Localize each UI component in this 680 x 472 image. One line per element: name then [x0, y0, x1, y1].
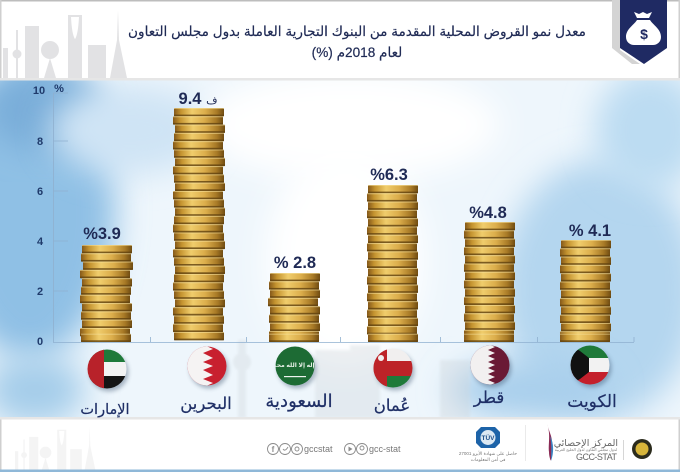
icon: Saudi flag: لا إله إلا الله محمد	[269, 362, 321, 369]
icon: Oman flag	[374, 348, 412, 388]
logo: TUV certificate: حاصل على شهادة الأيزو 27001	[459, 450, 517, 456]
icon: money bag ribbon: $	[640, 26, 648, 42]
footer skyline	[15, 426, 96, 471]
country labels	[80, 389, 617, 418]
title: معدل نمو القروض المحلية المقدمة من البنوك التجارية العاملة بدول مجلس التعاون	[128, 24, 586, 40]
axis labels: 8	[37, 136, 43, 148]
value labels: % 2.8	[274, 254, 316, 272]
axis labels: %	[54, 83, 64, 95]
bar: Oman coins	[367, 185, 418, 342]
icon: money bag ribbon	[612, 0, 667, 64]
value labels	[83, 90, 611, 272]
social icons: f	[272, 445, 275, 454]
bar: Bahrain coins	[173, 108, 225, 340]
logo: GCC-STAT	[547, 424, 652, 462]
icon: Saudi flag	[276, 346, 314, 386]
social handles: gcc-stat	[369, 444, 401, 454]
country labels: السعودية	[265, 391, 333, 412]
logo: TUV certificate: TÜV	[482, 433, 495, 442]
flag shadows	[90, 348, 612, 392]
logo: TUV certificate: في أمن المعلومات	[471, 456, 505, 462]
logo: GCC-STAT: المركز الإحصائي	[554, 438, 618, 449]
panel: chart background	[0, 60, 680, 425]
icon: Qatar flag	[470, 346, 510, 384]
country labels: الإمارات	[80, 402, 130, 418]
country labels: عُمان	[374, 396, 410, 415]
axis labels: 0	[37, 336, 43, 348]
logo: TUV certificate	[459, 427, 517, 462]
chart axes	[54, 93, 634, 342]
social handles: gccstat	[304, 444, 333, 454]
value labels: %3.9	[83, 225, 121, 243]
country labels: الكويت	[567, 392, 617, 411]
skyline watermark	[233, 340, 470, 418]
title: لعام 2018م (%)	[312, 45, 402, 60]
icon: Kuwait flag	[570, 346, 610, 384]
logo: GCC-STAT: GCC-STAT	[576, 452, 618, 462]
bar: UAE coins	[80, 245, 133, 342]
social handles	[304, 444, 401, 454]
value labels: % 4.1	[569, 222, 611, 240]
icon: Bahrain flag	[188, 346, 226, 386]
divider	[524, 425, 527, 461]
country labels: البحرين	[180, 395, 232, 414]
icon: UAE flag	[88, 350, 126, 388]
axis labels	[33, 83, 64, 348]
header skyline	[3, 10, 127, 78]
value labels: %6.3	[370, 166, 408, 184]
country labels: قطر	[473, 389, 504, 408]
axis labels: 6	[37, 186, 43, 198]
bar: Qatar coins	[464, 222, 515, 342]
axis labels: 10	[33, 85, 45, 97]
title	[128, 24, 586, 60]
axis labels: 4	[37, 236, 44, 248]
bar: Kuwait coins	[560, 240, 611, 342]
value labels: 9.4 ف	[179, 90, 217, 108]
value labels: %4.8	[469, 204, 507, 222]
social icons	[268, 444, 368, 454]
bar: Saudi coins	[268, 273, 320, 342]
logo: GCC-STAT: لدول مجلس التعاون لدول الخليج العربية	[555, 448, 617, 452]
axis labels: 2	[37, 286, 43, 298]
bottom rule	[0, 470, 680, 472]
